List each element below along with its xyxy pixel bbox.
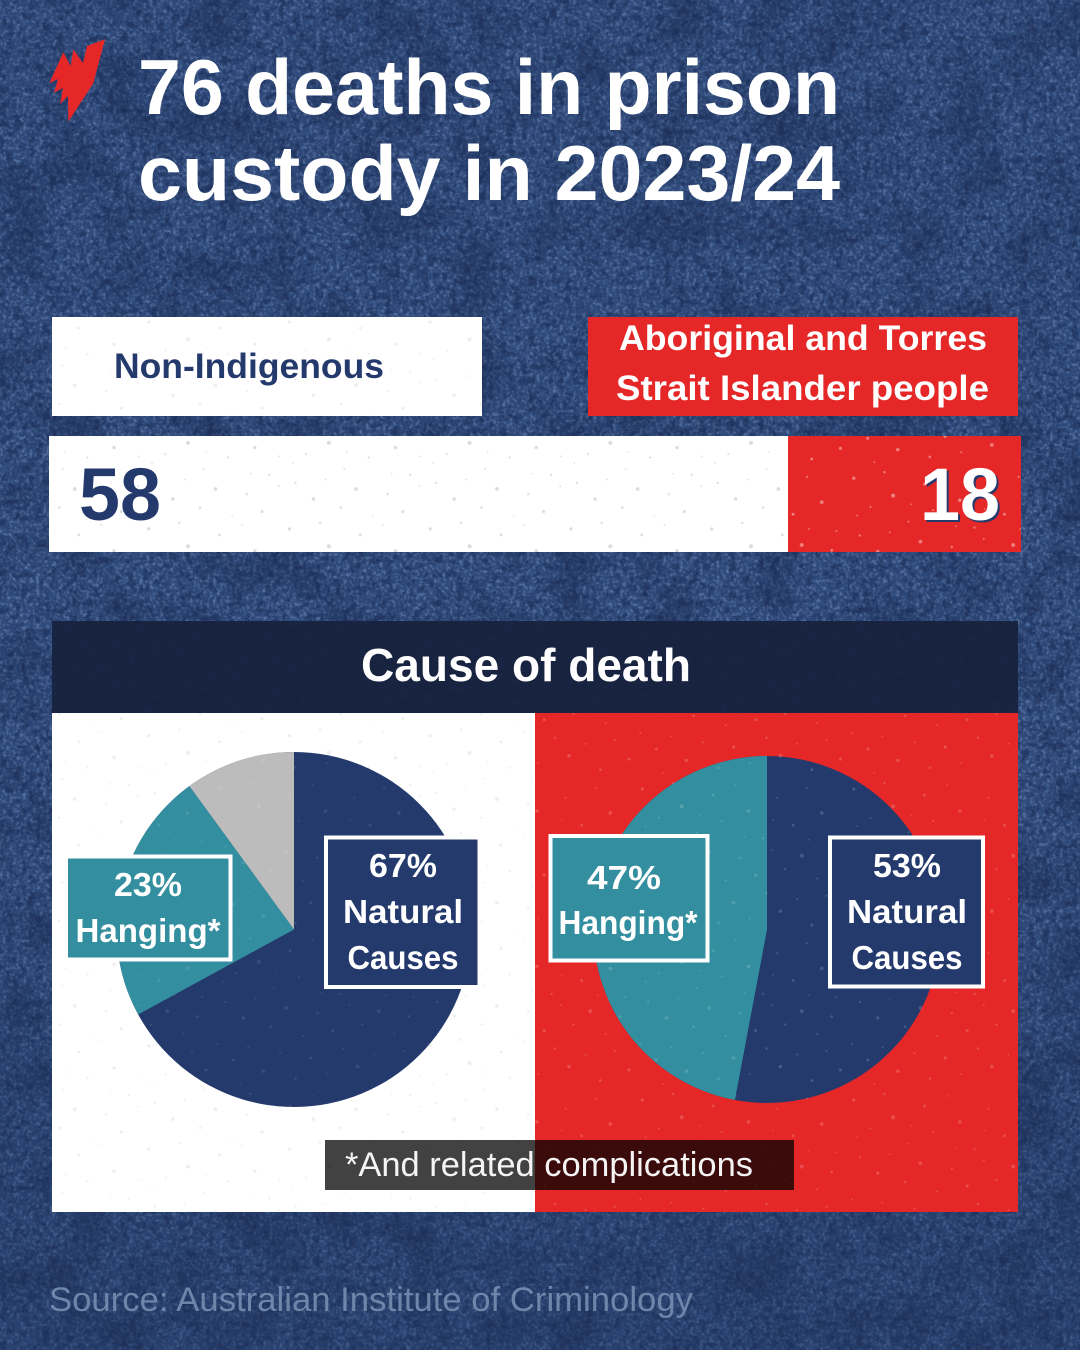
label: 53% natural causes: Natural (847, 893, 967, 930)
label: 23% hanging (66, 856, 230, 960)
source line: Source: Australian Institute of Criminology (49, 1281, 693, 1319)
legend label: Aboriginal and Torres Strait Islander people (588, 317, 1018, 416)
stacked bar: 58 vs 18 deaths (49, 436, 1021, 552)
title: 76 deaths in prison (138, 43, 840, 131)
footnote: related complications (325, 1140, 794, 1190)
label: 47% hanging (550, 836, 708, 960)
label: 67% natural causes (326, 838, 480, 987)
bar segment: non-Indigenous 58 (49, 436, 788, 552)
label: 67% natural causes: Natural (343, 893, 463, 930)
label: 23% hanging: 23% (114, 866, 182, 903)
footnote: related complications: *And related complications (345, 1146, 753, 1184)
label: 53% natural causes: Causes (852, 939, 962, 976)
label: 53% natural causes (830, 838, 983, 986)
label: 23% hanging: Hanging* (76, 912, 221, 949)
pie chart: non-Indigenous (120, 752, 462, 1107)
heading: Cause of death (52, 621, 1018, 713)
title (138, 43, 840, 217)
label: 53% natural causes: 53% (873, 847, 941, 884)
pie chart: Indigenous (590, 750, 945, 1110)
title: custody in 2023/24 (138, 129, 840, 217)
label: 47% hanging: Hanging* (558, 904, 698, 941)
bar segment: non-Indigenous 58: 58 (79, 453, 161, 536)
legend label: Aboriginal and Torres Strait Islander people: Strait Islander people (616, 369, 989, 408)
legend label: Non-Indigenous (52, 317, 482, 416)
bar segment: Indigenous 18: 18 (920, 453, 1000, 536)
panel: non-Indigenous causes (52, 713, 535, 1212)
label: 67% natural causes: 67% (369, 847, 437, 884)
bar segment: Indigenous 18 (788, 436, 1021, 552)
heading: Cause of death: Cause of death (361, 639, 691, 691)
icon: SBS flame logo (49, 39, 105, 122)
legend label: Aboriginal and Torres Strait Islander people: Aboriginal and Torres (619, 319, 987, 358)
bar segment: Indigenous 18: 18 (922, 455, 1002, 538)
legend label: Non-Indigenous: Non-Indigenous (114, 347, 384, 386)
label: 67% natural causes: Causes (348, 939, 458, 976)
panel: Indigenous causes (535, 713, 1018, 1212)
label: 47% hanging: 47% (587, 859, 661, 896)
